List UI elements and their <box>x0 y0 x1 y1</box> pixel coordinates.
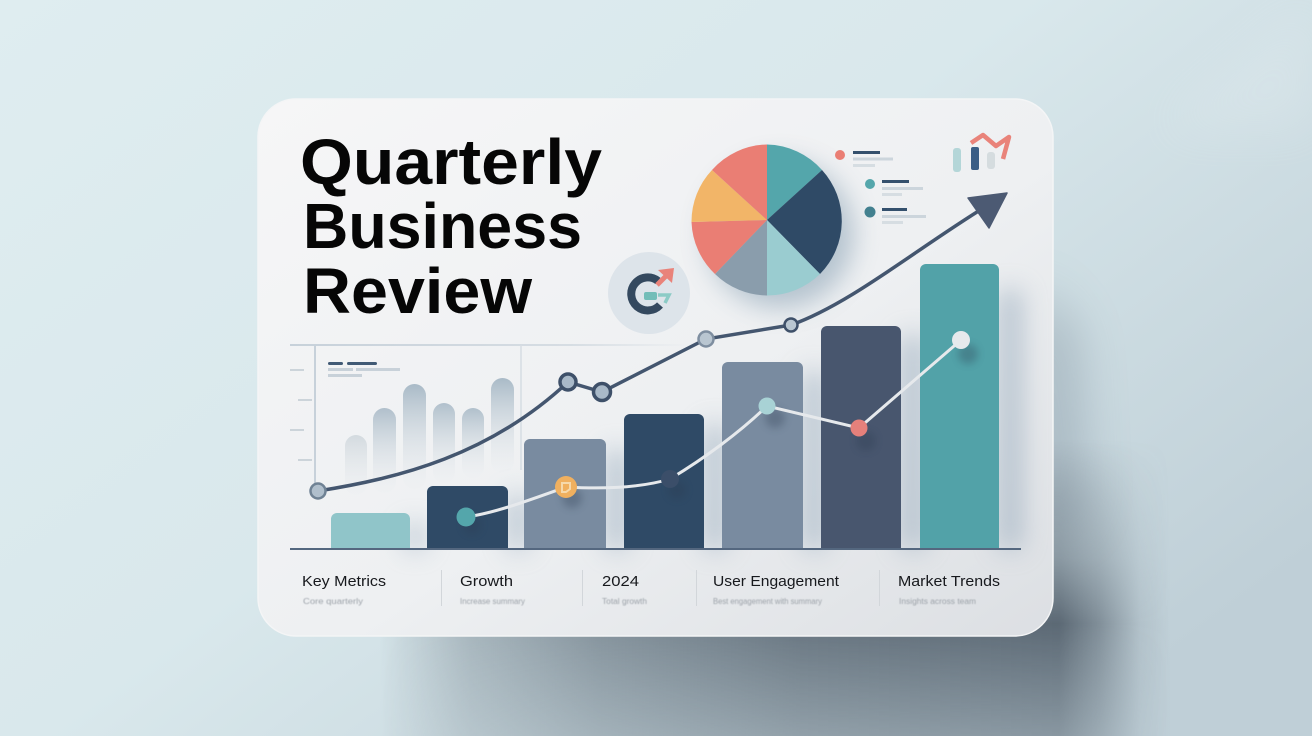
metric: Growth: Growth <box>460 573 513 590</box>
metric: Market Trends <box>879 570 1000 606</box>
bar shadows <box>405 290 1021 549</box>
panel: main card <box>258 99 1053 636</box>
card shadow <box>290 144 1156 736</box>
metric: 2024: Total growth <box>602 597 647 606</box>
metric: Key Metrics: Core quarterly <box>303 597 363 606</box>
chart baseline <box>290 548 1021 550</box>
icon: mini chart <box>953 135 1009 172</box>
metric: User Engagement: Best engagement with summary <box>713 597 822 606</box>
bar chart <box>331 264 999 549</box>
metric: User Engagement <box>696 570 840 606</box>
metric: Growth: Increase summary <box>460 597 525 606</box>
metric: 2024 <box>582 570 647 606</box>
metric: User Engagement: User Engagement <box>713 573 840 590</box>
ghost chart legend <box>328 362 400 377</box>
metric: Growth <box>441 570 525 606</box>
footer metrics <box>302 570 1000 606</box>
marker shadows <box>463 344 978 534</box>
metric: Key Metrics <box>302 573 386 606</box>
pie chart <box>691 144 854 308</box>
metric: Market Trends: Market Trends <box>898 573 1000 590</box>
pie legend <box>835 150 926 224</box>
title <box>300 126 602 327</box>
title: Review <box>303 255 532 327</box>
trend line with arrow <box>310 193 1007 498</box>
secondary line with markers <box>456 331 970 526</box>
ghost chart frame <box>290 344 690 485</box>
title: Business <box>303 190 582 262</box>
icon: growth badge <box>608 252 690 334</box>
metric: Market Trends: Insights across team <box>899 597 976 606</box>
metric: 2024: 2024 <box>602 573 639 590</box>
metric: Key Metrics: Key Metrics <box>302 573 386 590</box>
title: Quarterly <box>300 126 602 198</box>
ghost bar chart <box>345 378 514 495</box>
